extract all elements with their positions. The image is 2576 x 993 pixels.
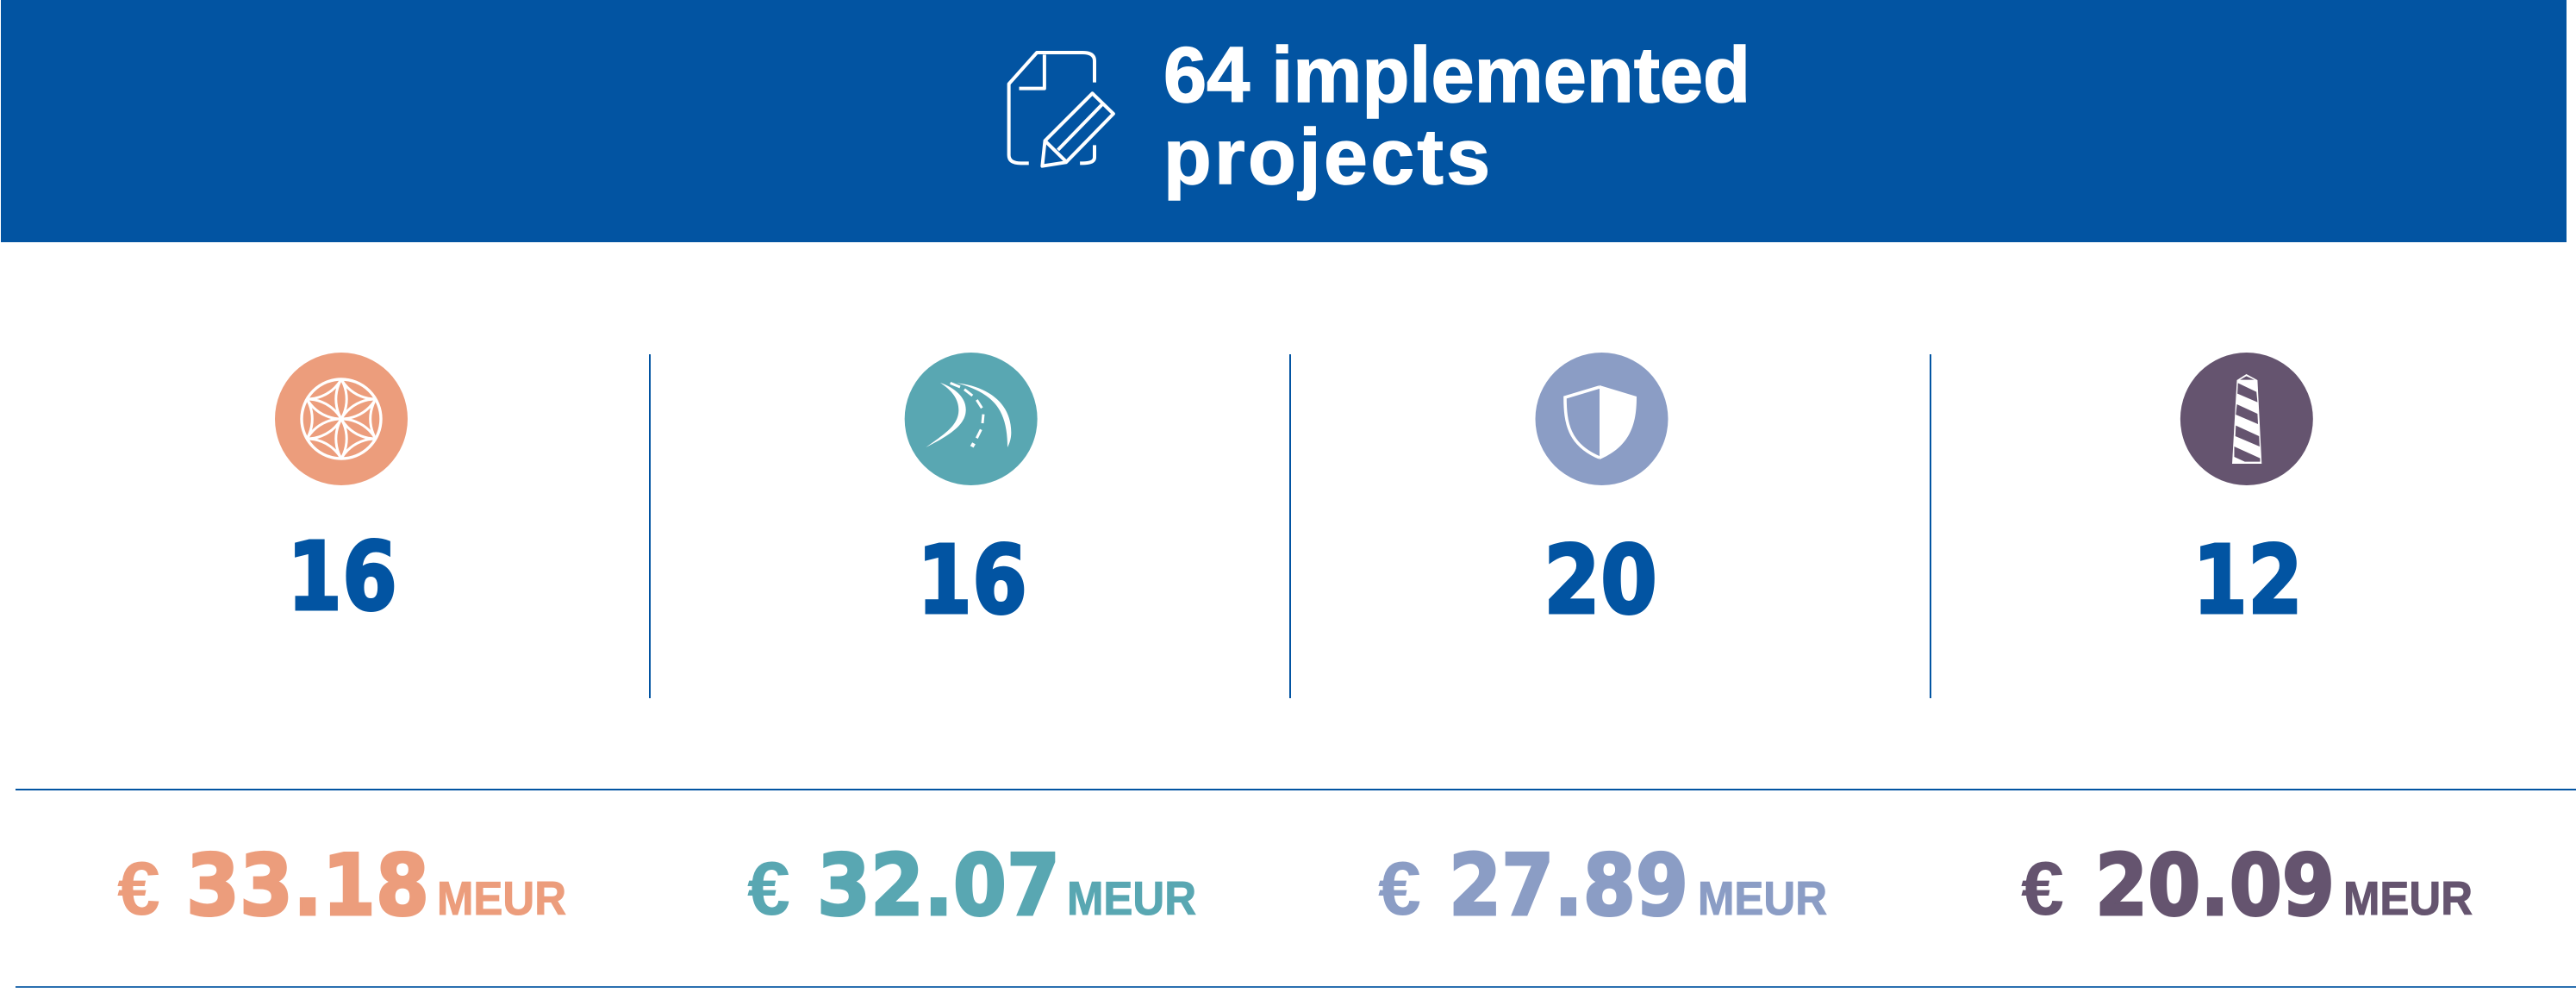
- panel: header banner: [1, 0, 2567, 242]
- budget: 33.18 MEUR: 33.18: [186, 837, 429, 935]
- title: [1163, 32, 1750, 201]
- budget: 27.89 MEUR: MEUR: [1698, 871, 1827, 925]
- title: 64 implemented: [1163, 32, 1750, 119]
- icon: road: [905, 353, 1038, 485]
- panel: category 1 count: [275, 353, 408, 612]
- number: 12 projects: 12: [2192, 525, 2303, 635]
- panel: category 4 count: [2180, 353, 2313, 635]
- top rule of budget row: [16, 789, 2576, 790]
- divider 2: [1289, 354, 1291, 698]
- number: 16 projects: 16: [287, 521, 397, 632]
- title: projects: [1163, 114, 1490, 201]
- budget: 32.07 MEUR: [747, 837, 1196, 935]
- budget: 20.09 MEUR: 20.09: [2095, 837, 2335, 935]
- number: 16 projects: 16: [917, 525, 1027, 635]
- budget: 20.09 MEUR: €: [2021, 846, 2064, 931]
- panel: category 2 count: [905, 353, 1038, 635]
- divider 3: [1930, 354, 1931, 698]
- icon: flower rosette: [275, 353, 408, 485]
- number: 20 projects: 20: [1544, 525, 1657, 635]
- budget: 32.07 MEUR: 32.07: [817, 837, 1060, 935]
- budget: 33.18 MEUR: MEUR: [437, 871, 566, 925]
- budget: 27.89 MEUR: 27.89: [1449, 837, 1688, 935]
- bottom rule of budget row: [16, 986, 2576, 988]
- budget: 20.09 MEUR: MEUR: [2343, 871, 2473, 925]
- budget: 20.09 MEUR: [2021, 837, 2473, 935]
- budget: 33.18 MEUR: [117, 837, 566, 935]
- budget: 33.18 MEUR: €: [117, 846, 160, 931]
- panel: category 3 count: [1536, 353, 1668, 635]
- icon: shield: [1536, 353, 1668, 485]
- icon: border post: [2180, 353, 2313, 485]
- icon: document with pencil: [1009, 53, 1113, 166]
- divider 1: [649, 354, 651, 698]
- budget: 32.07 MEUR: MEUR: [1067, 871, 1196, 925]
- budget: 27.89 MEUR: €: [1378, 846, 1421, 931]
- budget: 32.07 MEUR: €: [747, 846, 790, 931]
- budget: 27.89 MEUR: [1378, 837, 1827, 935]
